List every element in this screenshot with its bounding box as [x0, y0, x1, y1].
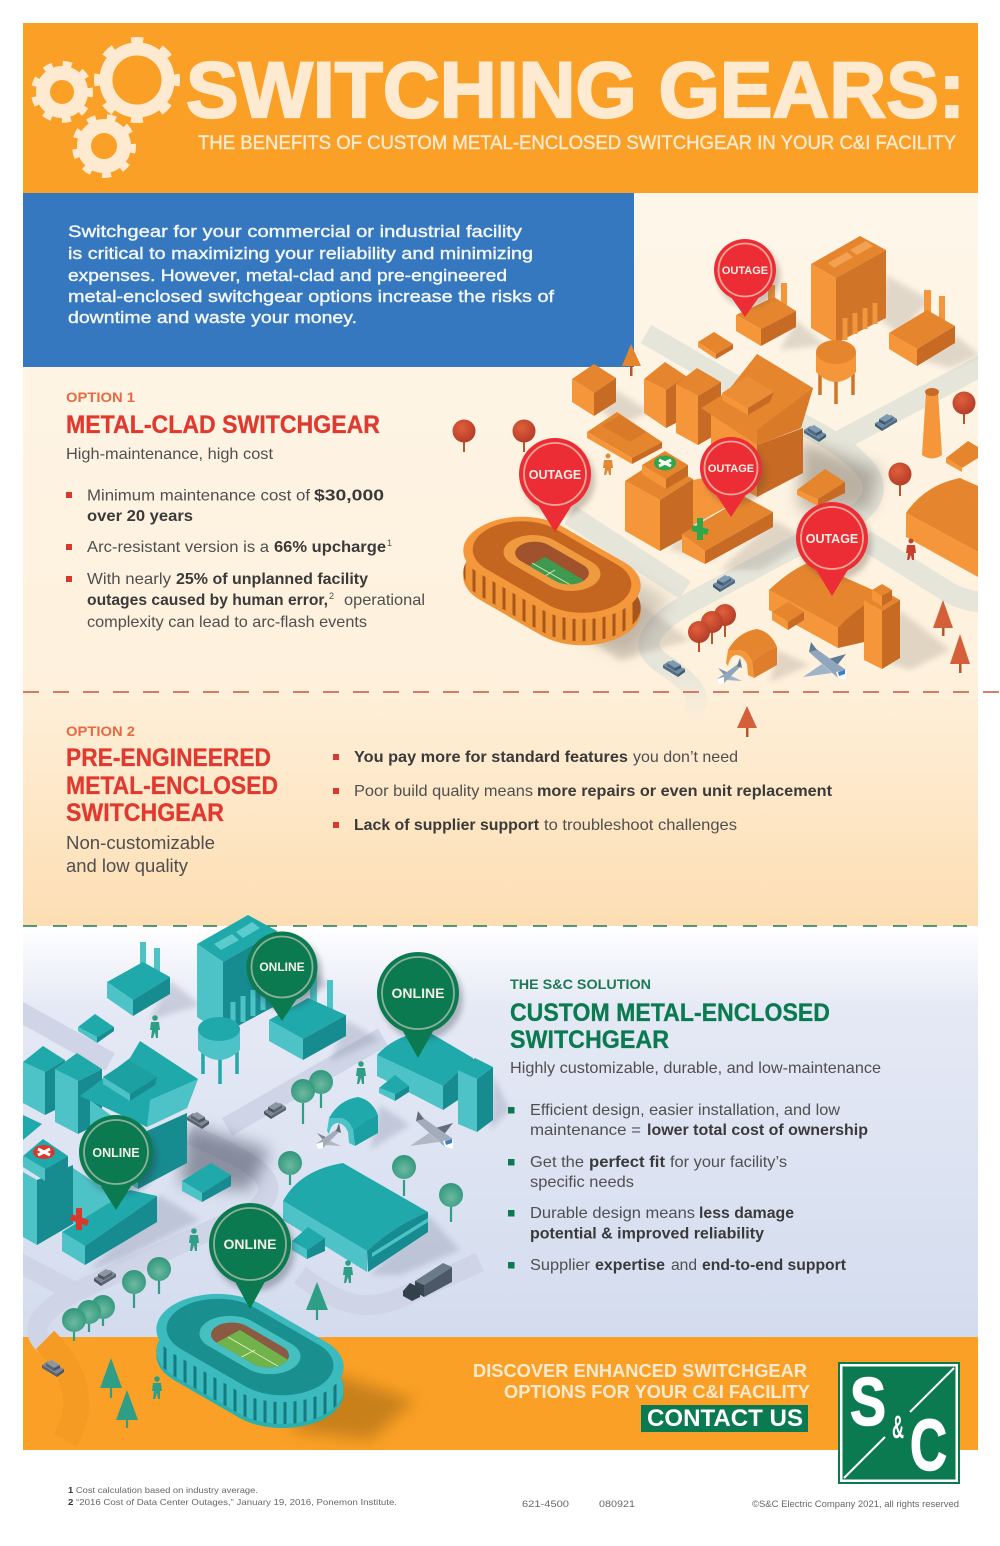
text: intro paragraph: [68, 222, 554, 327]
bullet 4: and: [671, 1257, 697, 1274]
title: SWITCHING GEARS:: [186, 45, 965, 134]
panel: option 1: [66, 389, 425, 631]
pin: online stadium: [209, 1203, 295, 1309]
icon: small box: [797, 469, 845, 506]
building: large: [80, 1041, 198, 1189]
heading: pre-engineered: SWITCHGEAR: [66, 799, 224, 827]
icon: person on band: [152, 1376, 162, 1399]
pin: online hospital: [79, 1115, 157, 1210]
building: factory right: [889, 290, 955, 366]
icon: person red: [906, 538, 916, 560]
logo: S&C: &: [892, 1409, 904, 1445]
bullet 3: potential & improved reliability: [530, 1226, 764, 1242]
panel: call to action band: [23, 1337, 978, 1450]
bullet 2: perfect fit: [589, 1154, 666, 1171]
bullet 2: more repairs or even unit replacement: [537, 783, 833, 800]
bullet 3: outages caused by human error,: [87, 592, 328, 609]
icon: car: [804, 425, 826, 442]
footnotes: 2 “2016 Cost of Data Center Outages,” January 19, 2016, Ponemon Institute.: [68, 1497, 397, 1507]
icon: pitch: [216, 1330, 298, 1380]
building: large: [701, 354, 813, 497]
bullet 3: Durable design means: [530, 1205, 695, 1222]
text: intro paragraph: expenses. However, metal-clad and pre-engineered: [68, 266, 507, 285]
bullet 1: $30,000: [314, 488, 384, 504]
bullet 2: Get the: [530, 1154, 584, 1171]
stadium: teal: [131, 1279, 415, 1443]
bullet 2: [333, 783, 833, 800]
shadows: ground: [590, 275, 980, 682]
icon: car: [875, 414, 897, 431]
bullet 3: complexity can lead to arc-flash events: [87, 614, 367, 631]
icon: truck: [403, 1263, 452, 1301]
building: factory B: [269, 975, 346, 1060]
icon: cone trees: [100, 1282, 328, 1428]
icon: person: [603, 454, 613, 475]
bullet 3: [508, 1205, 794, 1242]
icon: gears: [34, 40, 176, 175]
bullet 1: [508, 1102, 868, 1139]
building: left towers: [23, 1046, 102, 1134]
text: options: OPTIONS FOR YOUR C&I FACILITY: [504, 1381, 811, 1402]
label: option 2: OPTION 2: [66, 723, 135, 739]
subheading: Highly customizable, durable, and low-maintenance: [510, 1060, 881, 1077]
pin: outage top: [714, 239, 780, 317]
bullet 1: [66, 488, 384, 525]
building: low block with cross: [682, 470, 773, 564]
bullet 4: end-to-end support: [702, 1257, 847, 1274]
panel: S&C solution text: [508, 976, 881, 1274]
building: tower 1: [644, 362, 686, 428]
bullet 3: operational: [344, 592, 425, 609]
logo: S&C: S: [850, 1364, 886, 1440]
heading: custom metal-enclosed: CUSTOM METAL-ENCLOSED: [510, 999, 830, 1027]
panel: cream options background: [23, 193, 978, 926]
icon: person: [343, 1260, 353, 1283]
bullet 3: 25% of unplanned facility: [176, 571, 368, 588]
text: intro paragraph: is critical to maximizing your reliability and minimizing: [68, 244, 533, 263]
building: tall block: [811, 236, 886, 343]
icon: person: [189, 1228, 199, 1251]
bullet 3: Lack of supplier support: [354, 817, 540, 834]
bullet 2: [508, 1154, 787, 1191]
text: discover: DISCOVER ENHANCED SWITCHGEAR: [473, 1360, 807, 1381]
bullet 2: [66, 538, 392, 556]
building: cube: [572, 364, 616, 416]
bullet 2: 66% upcharge: [274, 539, 386, 556]
heading: pre-engineered: PRE-ENGINEERED: [66, 744, 271, 772]
building: factory with pin: [736, 283, 796, 346]
building: small box left: [23, 1115, 42, 1140]
bullet 1: you don’t need: [633, 749, 738, 766]
roads: [10, 1006, 480, 1345]
footnotes: 1 Cost calculation based on industry average.: [68, 1485, 258, 1495]
print codes: 080921: [599, 1499, 635, 1510]
icon: plane small: [316, 1123, 341, 1149]
icon: car: [713, 575, 735, 592]
subtitle: THE BENEFITS OF CUSTOM METAL-ENCLOSED SWITCHGEAR IN YOUR C&I FACILITY: [198, 133, 956, 154]
bullet 4: expertise: [595, 1257, 665, 1274]
pin: online hospital: ONLINE: [92, 1146, 140, 1160]
roads: [570, 334, 985, 716]
heading: custom metal-enclosed: SWITCHGEAR: [510, 1026, 669, 1054]
building: hospital: [625, 451, 693, 551]
pin: outage stadium: OUTAGE: [529, 468, 581, 482]
subheading: High-maintenance, high cost: [66, 446, 274, 463]
bullet 1: You pay more for standard features: [354, 749, 628, 766]
bullet 1: Efficient design, easier installation, and low: [530, 1102, 840, 1119]
subheading: [66, 833, 215, 876]
bullet 4: Supplier: [530, 1257, 591, 1274]
pin: online top: [246, 932, 322, 1021]
pin: outage stadium: [519, 438, 595, 532]
pin: outage hangar: OUTAGE: [806, 532, 858, 546]
icon: car: [94, 1269, 116, 1286]
illustration: orange city with outages: [439, 236, 985, 737]
bullet 3: less damage: [699, 1205, 794, 1222]
icon: red cross: [71, 1208, 88, 1230]
pin: outage hospital: [700, 437, 766, 517]
icon: person: [150, 1015, 160, 1038]
logo: S&C: C: [910, 1406, 947, 1486]
icon: car on band: [42, 1360, 64, 1377]
call to action: [473, 1360, 811, 1432]
text: intro paragraph: downtime and waste your money.: [68, 308, 357, 327]
pin: online stadium: ONLINE: [224, 1236, 276, 1252]
icon: green helipad: [654, 456, 676, 470]
shadow: large building: [800, 440, 880, 510]
pin: outage hangar: [796, 502, 872, 596]
building: factory A: [107, 942, 170, 1016]
building: tower 2: [676, 368, 721, 445]
print codes: [522, 1499, 635, 1510]
pin: online top: ONLINE: [259, 960, 305, 974]
icon: round red trees: [452, 392, 976, 652]
icon: red helipad: [33, 1145, 55, 1159]
bullet 1: Minimum maintenance cost of: [87, 488, 311, 504]
bullet 2: Poor build quality means: [354, 783, 533, 800]
label: option 1: OPTION 1: [66, 389, 135, 405]
building: tower by hangar: [864, 584, 900, 669]
panel: intro: [23, 193, 634, 367]
illustration: teal city online: [10, 915, 510, 1443]
building: hangar with tower: [377, 1031, 493, 1132]
icon: green cross: [692, 518, 708, 540]
icon: plane small: [717, 658, 742, 684]
heading: pre-engineered: [66, 744, 278, 827]
pin: outage hospital: OUTAGE: [708, 463, 754, 475]
building: small hangar: [726, 629, 777, 678]
building: hangar with pin: [769, 562, 873, 648]
icon: car: [663, 660, 685, 677]
bullet 3: [66, 571, 425, 631]
building: small flat box: [698, 332, 733, 359]
building: water tank: [198, 1017, 240, 1084]
label: the S&C solution: THE S&C SOLUTION: [510, 976, 651, 992]
building: low block with cross: [62, 1168, 157, 1265]
pin: online right: [377, 952, 463, 1058]
icon: pitch: [529, 557, 584, 584]
icon: cone tree: [622, 344, 641, 376]
icon: car: [264, 1102, 286, 1119]
building: small box: [78, 1014, 114, 1043]
heading: metal-clad: METAL-CLAD SWITCHGEAR: [66, 411, 380, 439]
building: low flat: [587, 412, 662, 464]
bullet 3: With nearly: [87, 571, 171, 588]
bullet 2: Arc-resistant version is a: [87, 539, 269, 556]
panel: header band: [23, 23, 978, 193]
bullet 2: 1: [387, 538, 392, 548]
stadium: orange: [463, 516, 671, 658]
bullet 3: [333, 817, 737, 834]
icon: cone trees: [737, 600, 970, 737]
building: big hangar: [283, 1163, 428, 1272]
icon: car: [187, 1112, 209, 1129]
building: water tank: [816, 340, 856, 404]
button: contact us: CONTACT US: [647, 1405, 803, 1432]
bullet 3: to troubleshoot challenges: [544, 817, 737, 834]
copyright: ©S&C Electric Company 2021, all rights reserved: [752, 1499, 959, 1510]
bullet 1: lower total cost of ownership: [647, 1122, 868, 1139]
shadows: ground: [90, 940, 510, 1275]
building: small hangar: [327, 1097, 378, 1146]
icon: person: [356, 1061, 366, 1084]
pin: online right: ONLINE: [392, 985, 444, 1001]
building: arched hangar right: [906, 478, 978, 577]
bullet 1: over 20 years: [87, 508, 193, 525]
print codes: 621-4500: [522, 1499, 569, 1510]
text: intro paragraph: Switchgear for your commercial or industrial facility: [68, 222, 523, 241]
building: small box centre: [182, 1163, 231, 1202]
building: tall: [197, 915, 277, 1034]
subheading: Non-customizable: [66, 833, 215, 853]
shadow: large building: [180, 1125, 270, 1190]
heading: custom metal-enclosed: [510, 999, 830, 1054]
icon: plane large: [410, 1111, 453, 1149]
bullet 2: for your facility’s: [670, 1154, 787, 1171]
logo: S&C: [838, 1362, 960, 1486]
bullet 4: [508, 1257, 847, 1274]
heading: pre-engineered: METAL-ENCLOSED: [66, 772, 278, 800]
subheading: and low quality: [66, 856, 188, 876]
text: intro paragraph: metal-enclosed switchgear options increase the risks of: [68, 287, 554, 306]
bullet 3: 2: [329, 591, 334, 601]
panel: option 2: [66, 723, 833, 876]
panel: solution background: [23, 926, 978, 1337]
pin: outage top: OUTAGE: [722, 265, 768, 277]
bullet 1: [333, 749, 738, 766]
bullet 2: specific needs: [530, 1174, 634, 1191]
footnotes: [68, 1485, 397, 1507]
road on orange: [45, 1340, 76, 1440]
icon: plane large: [803, 642, 846, 680]
building: hospital: [23, 1139, 73, 1245]
icon: round green trees: [62, 1070, 463, 1341]
bullet 1: maintenance =: [530, 1122, 641, 1139]
building: chimney right: [922, 388, 978, 472]
